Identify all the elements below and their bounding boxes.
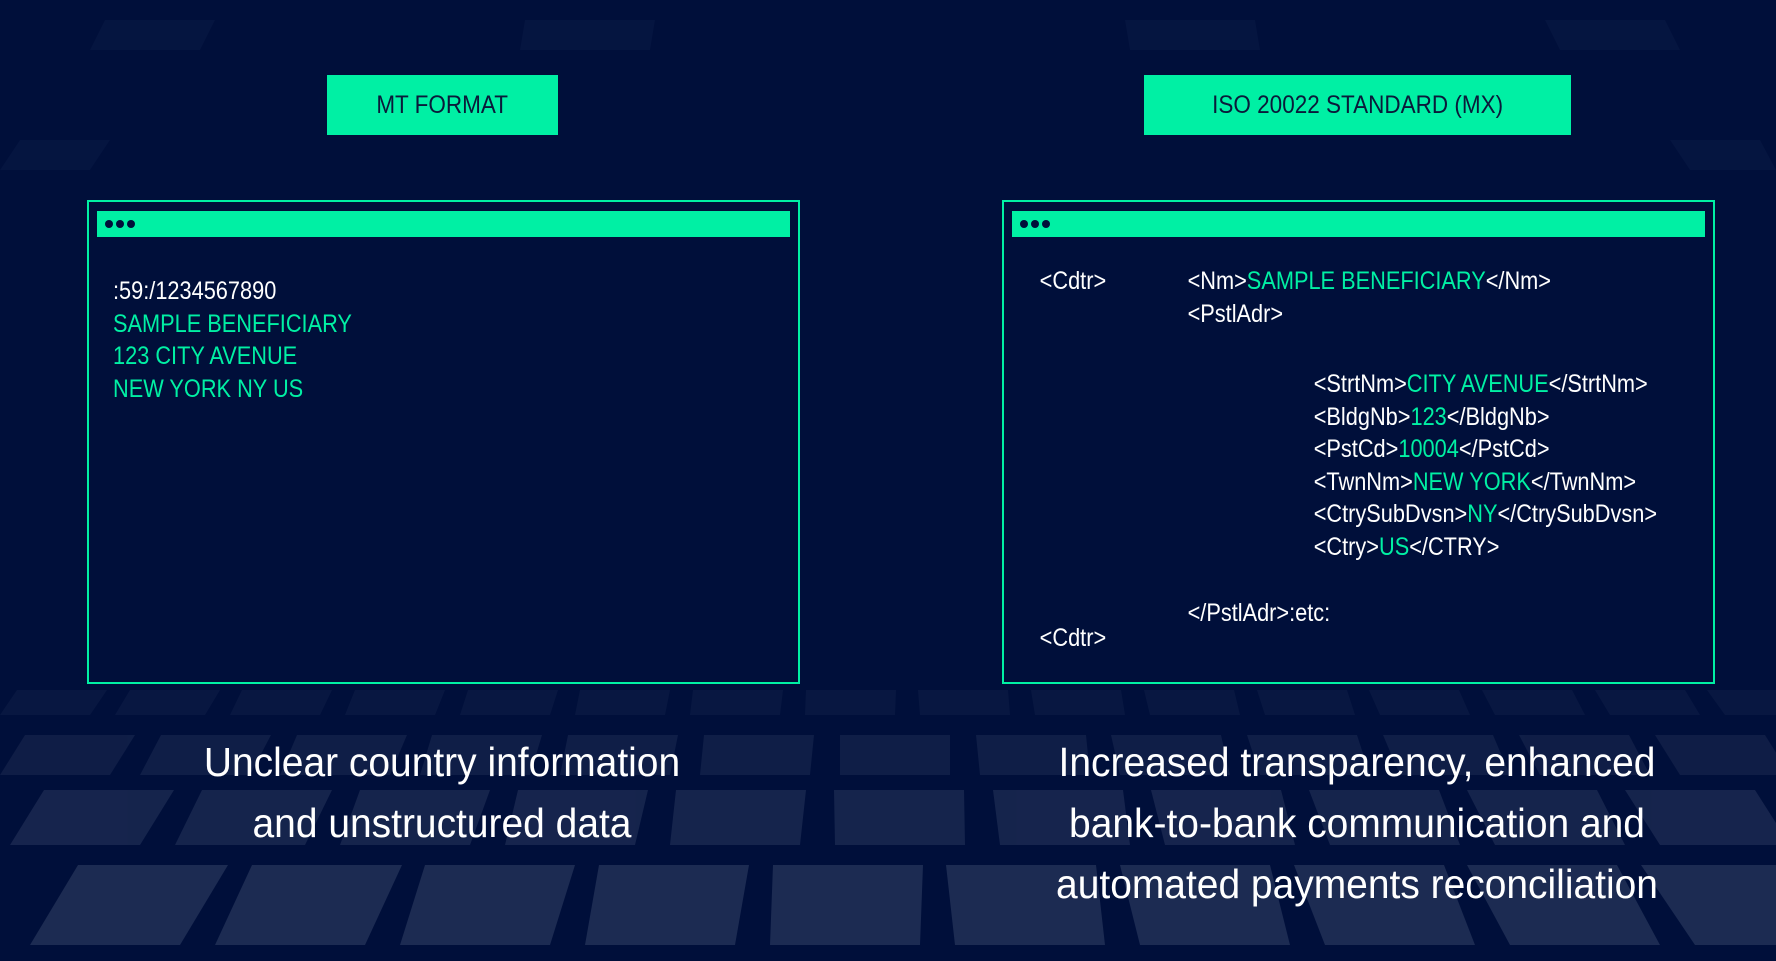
XML message text: <PstlAdr> (1188, 300, 1283, 328)
XML message text: <TwnNm>NEW YORK</TwnNm> (1314, 468, 1636, 496)
XML message text: <StrtNm>CITY AVENUE</StrtNm> (1314, 370, 1648, 398)
MT message text: SAMPLE BENEFICIARY (113, 310, 352, 338)
caption: MT (204, 739, 680, 846)
label: MT FORMAT (327, 75, 558, 135)
MT message text: NEW YORK NY US (113, 374, 303, 402)
XML message text: <BldgNb>123</BldgNb> (1314, 402, 1550, 430)
XML message text: <PstCd>10004</PstCd> (1314, 435, 1550, 463)
label: ISO 20022 STANDARD (MX) (1144, 75, 1571, 135)
window title bar (97, 211, 790, 237)
caption: ISO: automated payments reconciliation (1056, 861, 1658, 907)
XML message text: <Ctry>US</CTRY> (1314, 532, 1499, 560)
label: ISO 20022 STANDARD (MX): ISO 20022 STANDARD (MX) (1212, 90, 1503, 118)
panel: ISO 20022 window (1002, 200, 1715, 684)
XML message text: <Cdtr> (1040, 624, 1106, 652)
MT message text: :59:/1234567890 (113, 277, 276, 305)
caption: MT: Unclear country information (204, 739, 680, 785)
XML message text (1040, 267, 1657, 652)
XML message text: <Nm>SAMPLE BENEFICIARY</Nm> (1188, 267, 1551, 295)
MT message text: 123 CITY AVENUE (113, 342, 297, 370)
caption: MT: and unstructured data (253, 800, 631, 846)
XML message text: </PstlAdr>:etc: (1188, 599, 1330, 627)
label: MT FORMAT: MT FORMAT (377, 90, 508, 118)
panel: MT format window (87, 200, 800, 684)
XML message text: <CtrySubDvsn>NY</CtrySubDvsn> (1314, 500, 1657, 528)
caption: ISO: bank-to-bank communication and (1069, 800, 1645, 846)
MT message text (113, 277, 352, 402)
caption: ISO (1056, 739, 1658, 907)
caption: ISO: Increased transparency, enhanced (1059, 739, 1655, 785)
window title bar (1012, 211, 1705, 237)
XML message text: <Cdtr> (1040, 267, 1106, 295)
